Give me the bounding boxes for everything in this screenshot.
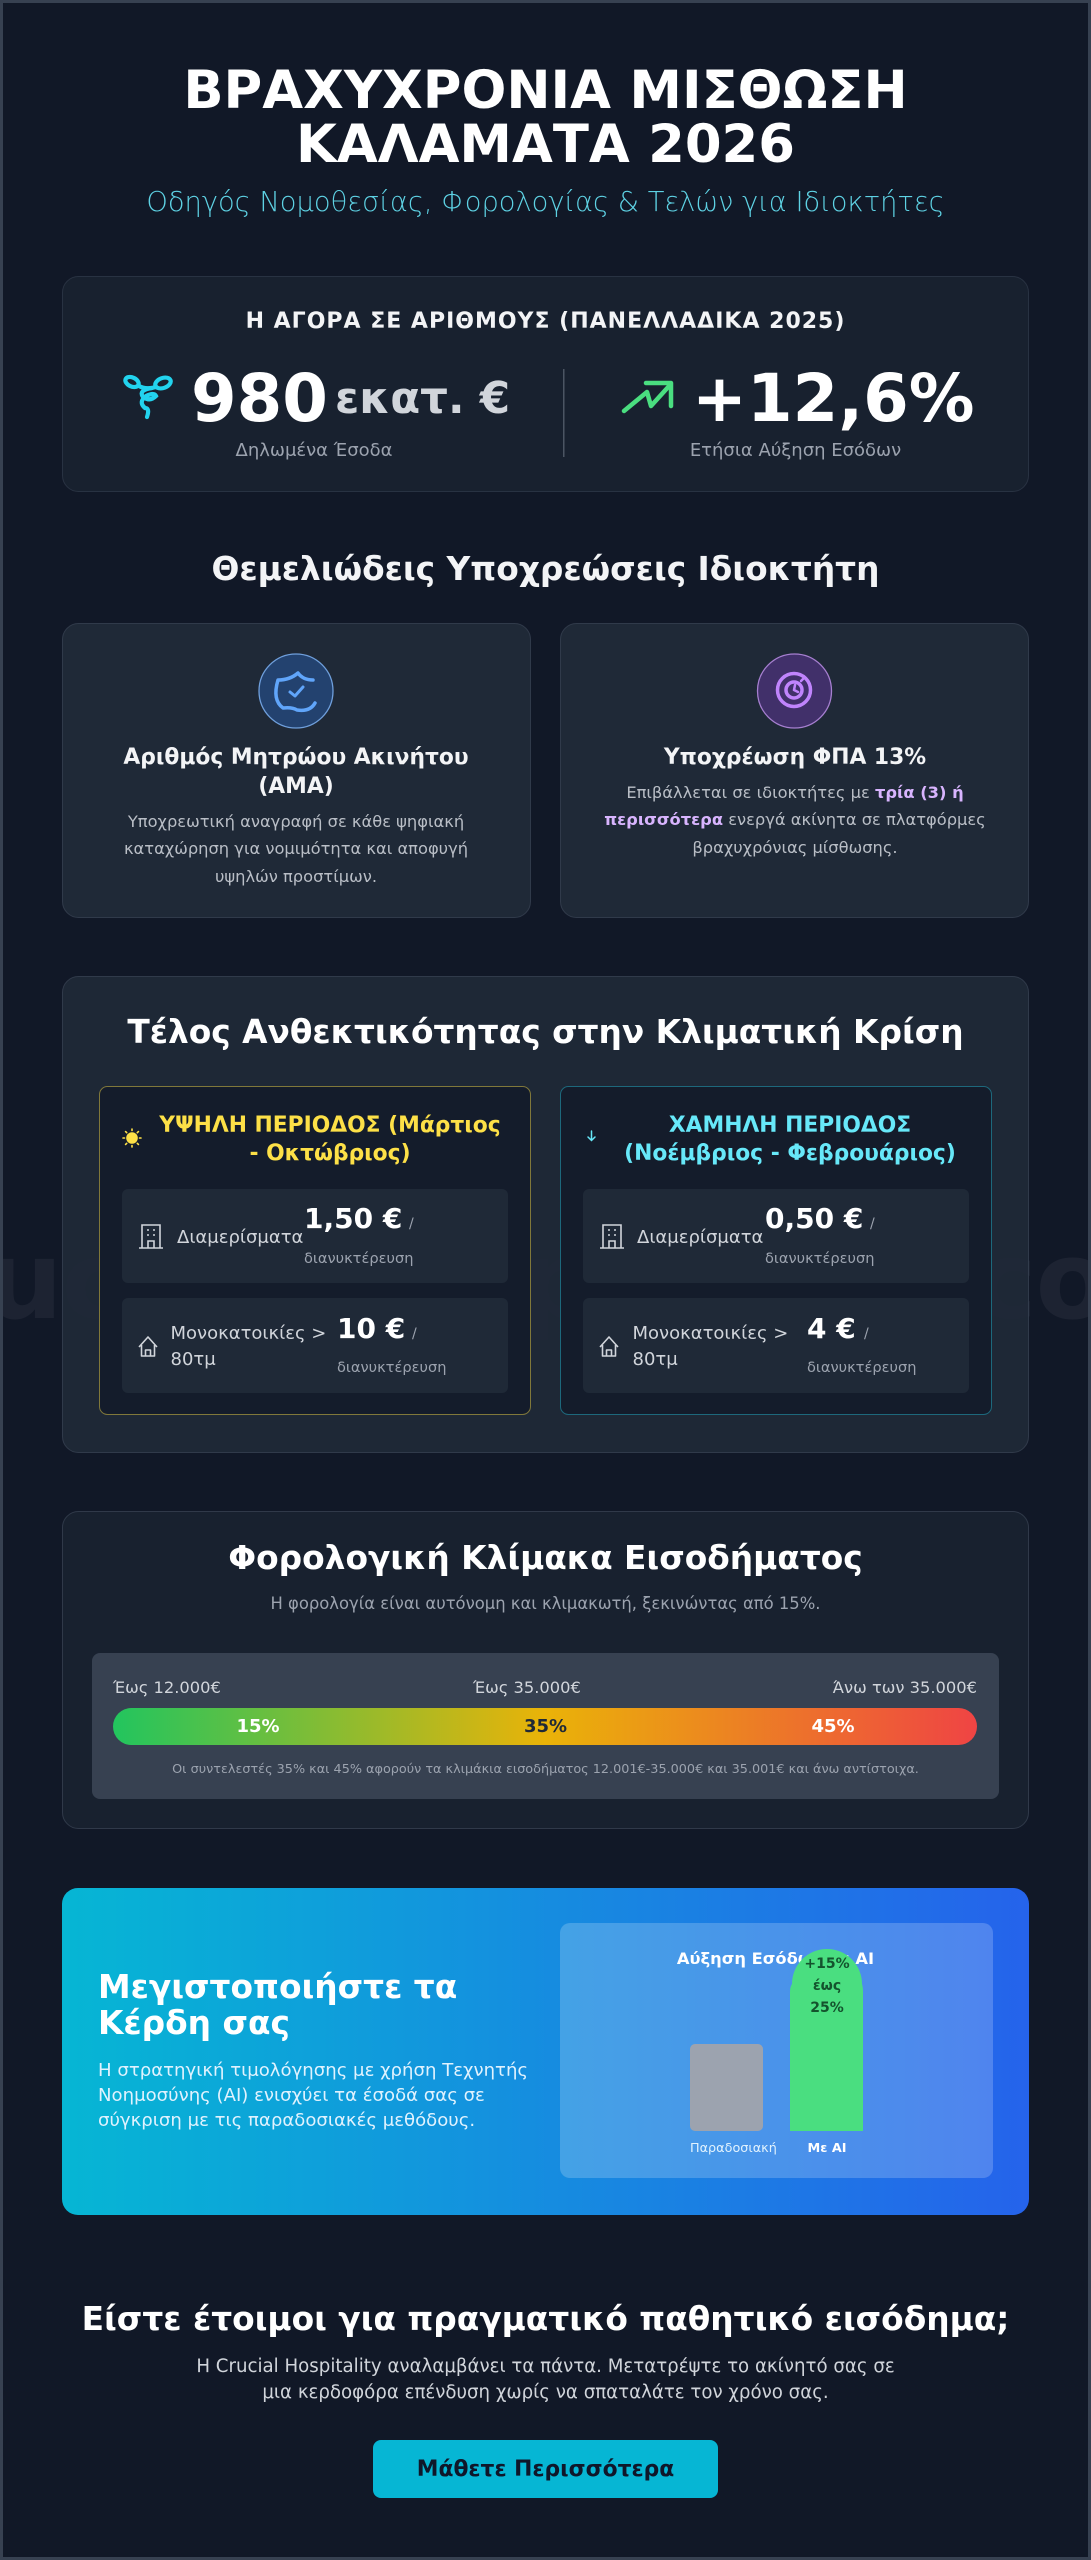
promo text: σύγκριση με τις παραδοσιακές μεθόδους. — [98, 2110, 475, 2131]
CTA text — [196, 2356, 895, 2403]
stat: annual growth: +12,6% — [692, 361, 975, 437]
button: Μάθετε Περισσότερα — [417, 2457, 674, 2482]
season heading: - Οκτώβριος) — [249, 1141, 411, 1166]
card text: περισσότερα ενεργά ακίνητα σε πλατφόρμες — [604, 810, 986, 829]
card title — [123, 745, 469, 799]
row: houses high: 80τμ — [170, 1349, 216, 1370]
title: ΚΑΛΑΜΑΤΑ 2026 — [296, 114, 795, 175]
panel: AMA card — [62, 624, 530, 918]
gradient bar: 35% — [524, 1716, 567, 1737]
stat: annual growth: Ετήσια Αύξηση Εσόδων — [690, 440, 901, 461]
promo text: Νοημοσύνης (AI) ενισχύει τα έσοδά σας σε — [98, 2085, 485, 2106]
panel: low season — [560, 1086, 992, 1414]
promo heading: Μεγιστοποιήστε τα — [98, 1968, 457, 2006]
stat: declared income — [191, 361, 510, 461]
stat: declared income: Δηλωμένα Έσοδα — [236, 440, 392, 461]
title — [183, 60, 908, 175]
gradient bar — [113, 1708, 977, 1745]
row: houses low: 80τμ — [632, 1349, 678, 1370]
card title: Αριθμός Μητρώου Ακινήτου — [123, 745, 469, 770]
tax intro text: Η φορολογία είναι αυτόνομη και κλιμακωτή, ξεκινώντας από 15%. — [270, 1594, 821, 1613]
card title: Υποχρέωση ΦΠΑ 13% — [663, 745, 926, 770]
row: apartments high: διανυκτέρευση — [304, 1250, 413, 1267]
promo text — [98, 2060, 528, 2131]
icon: shield — [259, 654, 333, 728]
icon: house — [600, 1337, 618, 1356]
heading: market: Η ΑΓΟΡΑ ΣΕ ΑΡΙΘΜΟΥΣ (ΠΑΝΕΛΛΑΔΙΚΑ 2025) — [246, 309, 845, 334]
subtitle: Οδηγός Νομοθεσίας, Φορολογίας & Τελών για Ιδιοκτήτες — [146, 187, 945, 218]
panel: maximize profits — [62, 1888, 1029, 2215]
heading: call to action: Είστε έτοιμοι για πραγματικό παθητικό εισόδημα; — [82, 2300, 1009, 2338]
bracket labels: Άνω των 35.000€ — [833, 1678, 977, 1697]
chart: AI revenue growth: Παραδοσιακή — [690, 2141, 777, 2156]
CTA text: μια κερδοφόρα επένδυση χωρίς να σπαταλάτε τον χρόνο σας. — [262, 2382, 829, 2403]
title: ΒΡΑΧΥΧΡΟΝΙΑ ΜΙΣΘΩΣΗ — [183, 60, 908, 121]
icon: house — [139, 1337, 157, 1356]
row: apartments high: 1,50 € — [304, 1202, 402, 1235]
stat: declared income: 980 — [191, 361, 328, 437]
row: apartments low: Διαμερίσματα — [637, 1227, 763, 1248]
icon: building — [600, 1225, 624, 1248]
row: apartments low: / — [870, 1216, 875, 1232]
row: apartments high: Διαμερίσματα — [177, 1227, 303, 1248]
icon: target — [758, 654, 832, 728]
tax scale box — [92, 1653, 999, 1799]
icon: sun — [123, 1129, 141, 1147]
bracket labels — [112, 1678, 977, 1697]
card text: Επιβάλλεται σε ιδιοκτήτες με τρία (3) ή — [626, 783, 964, 802]
season heading: ΧΑΜΗΛΗ ΠΕΡΙΟΔΟΣ — [669, 1113, 911, 1138]
icon: down arrow — [588, 1131, 595, 1140]
card text: βραχυχρόνιας μίσθωσης. — [692, 838, 898, 857]
row: houses low: 4 € — [807, 1312, 856, 1345]
row: houses high: / — [412, 1326, 417, 1342]
panel: market in numbers — [62, 276, 1028, 492]
icon: building — [139, 1225, 163, 1248]
chart: AI revenue growth: έως — [813, 1978, 841, 1994]
row: houses high: διανυκτέρευση — [337, 1359, 446, 1376]
panel: high season — [100, 1086, 530, 1414]
season heading — [158, 1113, 501, 1166]
heading: tax: Φορολογική Κλίμακα Εισοδήματος — [228, 1539, 863, 1577]
chart: AI revenue growth: Αύξηση Εσόδων με AI — [677, 1949, 874, 1968]
row: houses low: Μονοκατοικίες > — [632, 1323, 788, 1344]
row: apartments low — [583, 1189, 969, 1283]
chart: AI revenue growth: +15% — [804, 1956, 850, 1972]
panel: climate resilience fee — [62, 976, 1028, 1452]
gradient bar: 15% — [236, 1716, 280, 1737]
chart: AI revenue growth: Με AI — [808, 2141, 846, 2156]
button — [373, 2440, 718, 2498]
gradient bar: 45% — [811, 1716, 855, 1737]
heading: owner obligations: Θεμελιώδεις Υποχρεώσεις Ιδιοκτήτη — [212, 550, 879, 588]
promo heading — [98, 1968, 457, 2042]
row: apartments low: διανυκτέρευση — [765, 1250, 874, 1267]
icon: coins squiggle — [124, 375, 172, 417]
row: houses low: / — [864, 1326, 869, 1342]
card text: υψηλών προστίμων. — [215, 867, 377, 886]
row: houses high: 10 € — [337, 1312, 405, 1345]
promo text: Η στρατηγική τιμολόγησης με χρήση Τεχνητής — [98, 2060, 528, 2081]
row: apartments low: 0,50 € — [765, 1202, 863, 1235]
row: houses high — [122, 1298, 508, 1393]
chart: AI revenue growth — [560, 1923, 993, 2178]
row: apartments high: / — [409, 1216, 414, 1232]
row: apartments high — [122, 1189, 508, 1283]
card text: Υποχρεωτική αναγραφή σε κάθε ψηφιακή — [127, 812, 464, 831]
row: houses high: Μονοκατοικίες > — [170, 1323, 326, 1344]
card text — [604, 783, 986, 857]
card text — [124, 812, 468, 886]
chart: AI revenue growth: 25% — [810, 2000, 844, 2016]
panel: income tax scale — [62, 1512, 1028, 1828]
promo heading: Κέρδη σας — [98, 2004, 290, 2042]
heading: climate fee: Τέλος Ανθεκτικότητας στην Κλιματική Κρίση — [127, 1013, 964, 1051]
panel: VAT card — [560, 624, 1028, 918]
season heading — [624, 1113, 956, 1166]
row: houses low — [583, 1298, 969, 1393]
tax note: Οι συντελεστές 35% και 45% αφορούν τα κλιμάκια εισοδήματος 12.001€-35.000€ και 35.001€ και άνω αντίστοιχα. — [172, 1762, 919, 1777]
bracket labels: Έως 35.000€ — [472, 1678, 581, 1697]
CTA text: Η Crucial Hospitality αναλαμβάνει τα πάντα. Μετατρέψτε το ακίνητό σας σε — [196, 2356, 895, 2377]
season heading: (Νοέμβριος - Φεβρουάριος) — [624, 1141, 956, 1166]
icon: trend up — [624, 383, 671, 411]
card text: καταχώρηση για νομιμότητα και αποφυγή — [124, 839, 468, 858]
row: houses low: διανυκτέρευση — [807, 1359, 916, 1376]
stat: declared income: εκατ. € — [335, 374, 510, 424]
card title: (AMA) — [258, 774, 334, 799]
bracket labels: Έως 12.000€ — [112, 1678, 221, 1697]
season heading: ΥΨΗΛΗ ΠΕΡΙΟΔΟΣ (Μάρτιος — [158, 1113, 501, 1138]
